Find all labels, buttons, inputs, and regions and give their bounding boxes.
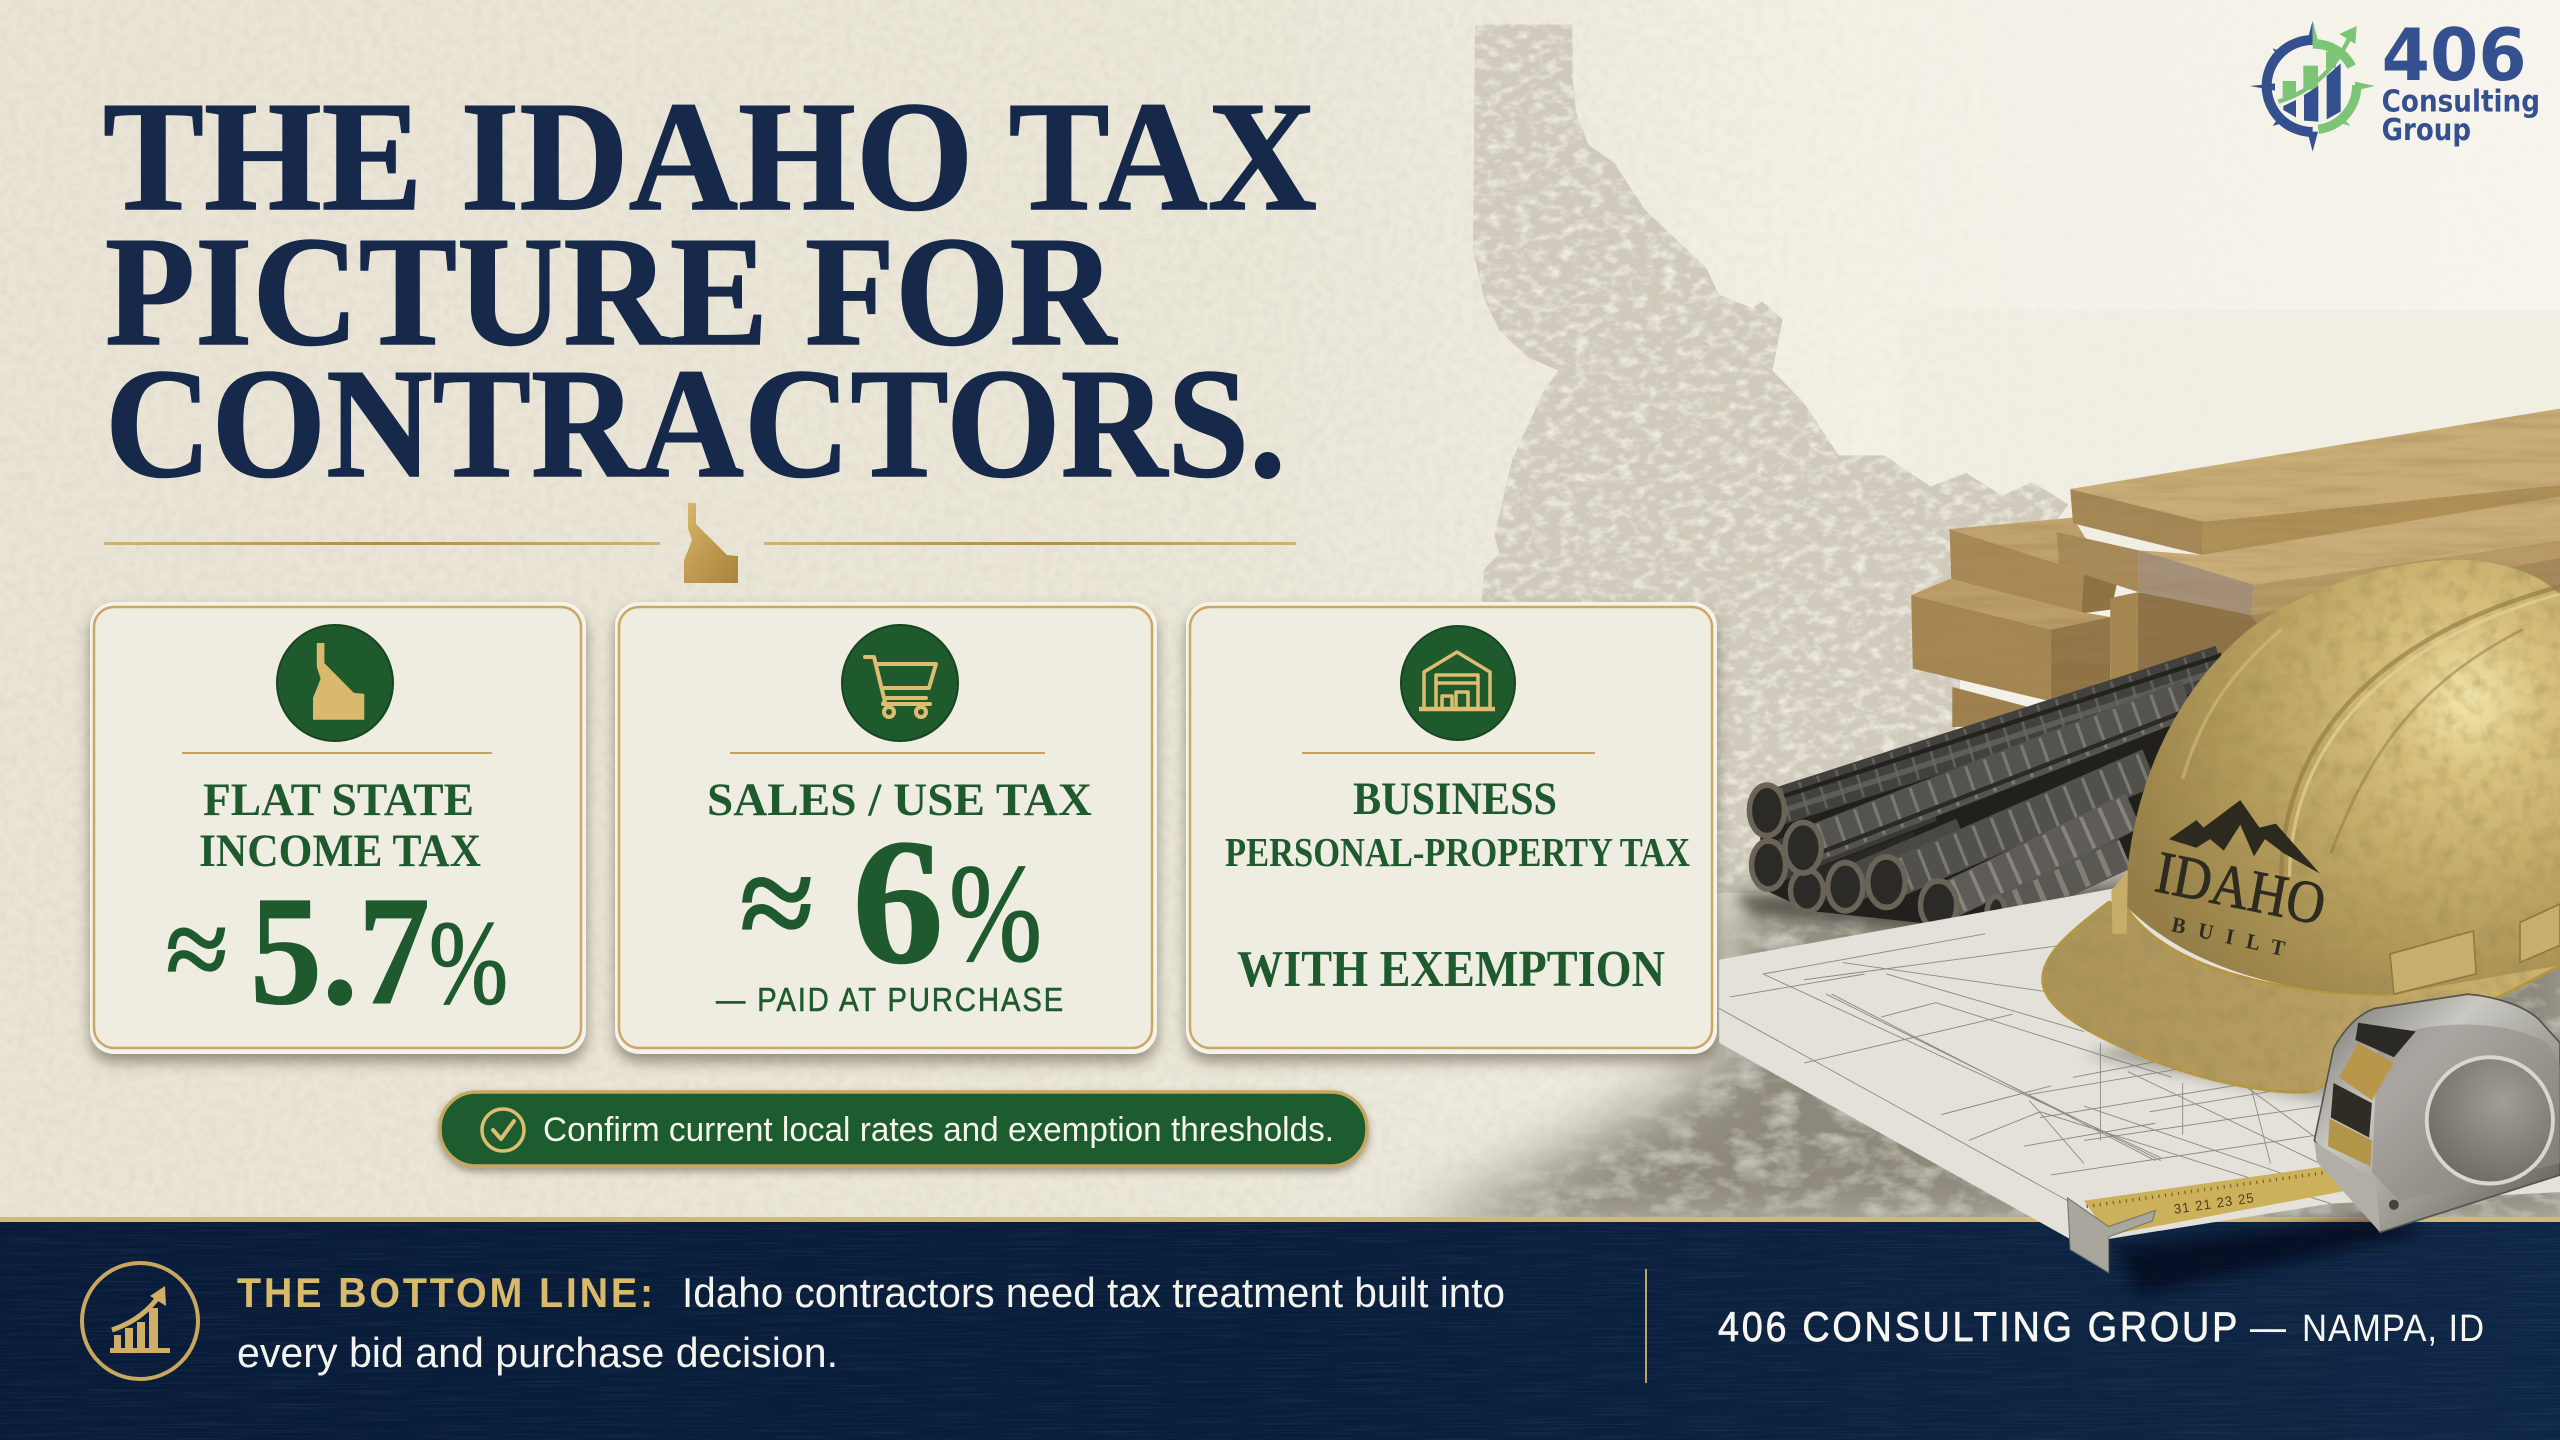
heading: business personal-property tax: PERSONAL-PROPERTY TAX bbox=[1225, 829, 1690, 875]
icon: check mark bbox=[482, 1109, 524, 1151]
divider with small Idaho icon bbox=[104, 503, 1296, 583]
large Idaho map watermark bbox=[1473, 25, 2068, 893]
logo mark: compass and chart bbox=[2250, 21, 2375, 152]
callout: confirm rates bbox=[440, 1092, 1367, 1166]
icon: growth chart bbox=[82, 1263, 198, 1379]
logo wordmark: Group bbox=[2382, 113, 2471, 148]
tape body bbox=[2314, 994, 2560, 1232]
tape blade bbox=[2067, 1161, 2369, 1272]
lumber stack bbox=[1911, 409, 2560, 727]
icon: Idaho state bbox=[277, 625, 393, 741]
heading: business personal-property tax bbox=[1225, 773, 1690, 875]
blueprint sheet bbox=[1719, 888, 2560, 1244]
value: approx 5.7 percent: 5.7 bbox=[250, 864, 430, 1037]
value: with exemption: WITH EXEMPTION bbox=[1237, 941, 1665, 998]
photo: construction materials bbox=[1719, 409, 2560, 1244]
icon: shopping cart bbox=[842, 625, 958, 741]
value: approx 5.7 percent bbox=[166, 864, 508, 1037]
helmet logo: Idaho Built: BUILT bbox=[2170, 912, 2287, 961]
value: approx 6 percent: ≈ bbox=[740, 829, 814, 978]
helmet logo: Idaho Built: IDAHO bbox=[2151, 838, 2331, 938]
logo: 406 Consulting Group bbox=[2250, 13, 2540, 152]
tape blade: 31 21 23 25 bbox=[2173, 1190, 2256, 1217]
text: company and location: NAMPA, ID bbox=[2302, 1308, 2485, 1350]
text: company and location: — bbox=[2250, 1303, 2286, 1350]
hard hat bbox=[2043, 560, 2560, 1100]
value: approx 5.7 percent: % bbox=[429, 896, 508, 1029]
text: the bottom line: Idaho contractors need tax treatment built into bbox=[682, 1269, 1505, 1316]
text: the bottom line: every bid and purchase decision. bbox=[237, 1329, 838, 1376]
logo wordmark bbox=[2382, 13, 2540, 148]
heading: flat state income tax bbox=[199, 774, 481, 877]
bottom band bbox=[0, 1217, 2560, 1440]
note: paid at purchase: — PAID AT PURCHASE bbox=[716, 981, 1065, 1018]
title: THE IDAHO TAX bbox=[103, 69, 1317, 243]
text: company and location: 406 CONSULTING GROUP bbox=[1718, 1303, 2240, 1350]
logo wordmark: 406 bbox=[2382, 13, 2527, 97]
icon: warehouse bbox=[1401, 626, 1515, 740]
value: approx 6 percent: % bbox=[949, 836, 1042, 991]
panel: sales / use tax bbox=[615, 602, 1157, 1054]
heading: flat state income tax: INCOME TAX bbox=[199, 825, 481, 877]
helmet logo: Idaho Built bbox=[2151, 800, 2331, 961]
text: the bottom line bbox=[237, 1269, 1505, 1376]
panel: flat state income tax bbox=[90, 602, 586, 1054]
value: approx 5.7 percent: ≈ bbox=[166, 887, 228, 1012]
heading: business personal-property tax: BUSINESS bbox=[1353, 773, 1557, 825]
value: approx 6 percent: 6 bbox=[852, 802, 944, 1001]
title bbox=[103, 69, 1317, 510]
title: CONTRACTORS. bbox=[105, 336, 1286, 510]
text: the bottom line: THE BOTTOM LINE: bbox=[237, 1269, 656, 1316]
heading: sales / use tax: SALES / USE TAX bbox=[707, 774, 1092, 826]
photo: tape measure bbox=[2067, 994, 2560, 1295]
panel: business personal-property tax bbox=[1186, 602, 1717, 1054]
title: PICTURE FOR bbox=[105, 204, 1118, 378]
callout: confirm rates: Confirm current local rates and exemption thresholds. bbox=[543, 1111, 1334, 1149]
heading: flat state income tax: FLAT STATE bbox=[203, 774, 474, 826]
value: approx 6 percent bbox=[740, 802, 1042, 1001]
rebar bundle bbox=[1733, 653, 2221, 934]
concrete work surface bbox=[1400, 840, 2560, 1240]
